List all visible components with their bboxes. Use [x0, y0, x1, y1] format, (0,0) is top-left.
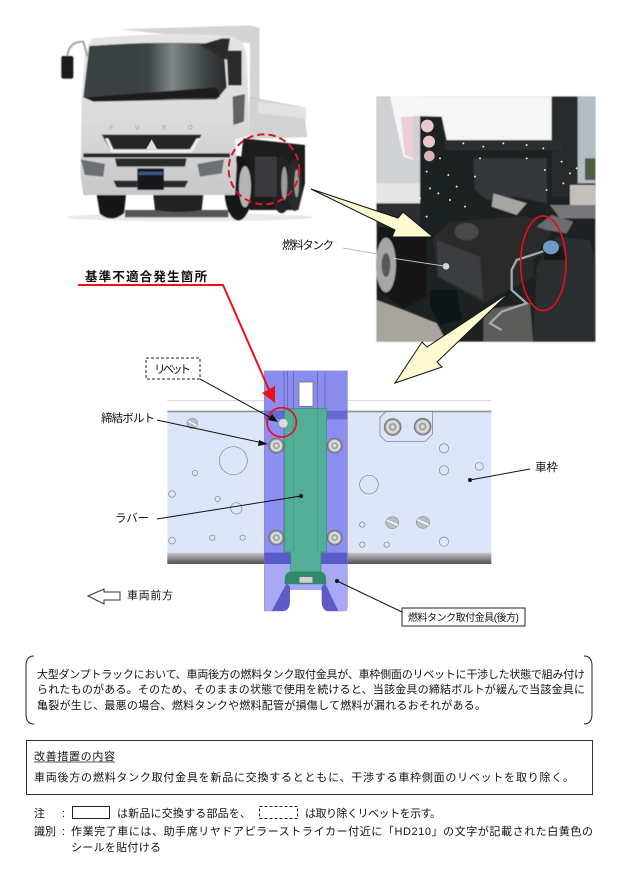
note: は新品に交換する部品を、 [117, 807, 251, 820]
note: は取り除くリベットを示す。 [305, 806, 441, 820]
description text: 大型ダンプトラックにおいて、車両後方の燃料タンク取付金具が、車枠側面のリベットに干渉した状態で組み付け [37, 667, 585, 681]
photo: fuel tank close-up [376, 97, 595, 342]
label: vehicle front arrow: 車両前方 [127, 588, 173, 602]
note [34, 806, 441, 820]
tank [433, 216, 553, 303]
note: 注 [34, 807, 45, 820]
plate with bolts [380, 412, 433, 441]
identification note [34, 824, 593, 854]
legend: solid box [72, 806, 110, 818]
identification note: シールを貼付ける [71, 840, 161, 854]
arrow: truck to close-up [311, 189, 433, 237]
wheel [378, 227, 427, 308]
label: fuel tank [282, 238, 377, 254]
cab [81, 34, 250, 195]
frame holes [169, 444, 483, 547]
bolts [269, 438, 284, 453]
label: vehicle front arrow [88, 588, 173, 604]
pink plate holes [421, 120, 434, 132]
description text: 亀裂が生じ、最悪の場合、燃料タンクや燃料配管が損傷して燃料が漏れるおそれがある。 [37, 698, 486, 712]
label: fastening bolt [101, 411, 268, 446]
pointer dot [393, 258, 449, 270]
mirror [67, 42, 87, 57]
label: rivet: リベット [154, 364, 191, 376]
bracket: blue body [264, 371, 347, 611]
panel: description [26, 656, 592, 724]
heading: non-conformity location: 基準不適合発生箇所 [85, 269, 207, 284]
label: fuel tank bracket (rear) [335, 579, 525, 626]
frame rail [167, 412, 491, 553]
rubber pad [284, 408, 327, 584]
engine bay [473, 158, 547, 203]
remedy text: 車両後方の燃料タンク取付金具を新品に交換するとともに、干渉する車枠側面のリベットを取り除く。 [34, 770, 574, 784]
red arrow: location [78, 285, 275, 403]
rivets [187, 418, 430, 529]
label: rubber [115, 494, 303, 525]
label: fuel tank: 燃料タンク [282, 238, 334, 252]
panel: remedy [26, 740, 592, 794]
callout: red dashed ellipse [229, 134, 299, 204]
grille [102, 135, 202, 149]
description text: られたものがある。そのため、そのままの状態で使用を続けると、当該金具の締結ボルトが緩んで当該金具に [37, 682, 585, 696]
arrow: close-up to diagram [395, 292, 510, 383]
note: : [62, 808, 65, 820]
legend: dashed box [260, 806, 298, 818]
blue cap and pipe [490, 240, 559, 330]
interfering rivet [279, 419, 288, 428]
label: rubber: ラバー [115, 512, 149, 525]
label: rivet [146, 358, 278, 422]
red circle [267, 408, 296, 437]
bolts [417, 142, 578, 218]
callout: red ellipse [521, 216, 566, 311]
reservoir [533, 237, 595, 342]
label: frame: 車枠 [535, 460, 558, 474]
label: fuel tank bracket (rear): 燃料タンク取付金具(後方) [408, 611, 519, 624]
photo: dump truck [61, 25, 313, 221]
dump body [120, 25, 259, 100]
identification note: 識別 [34, 825, 56, 838]
remedy heading: 改善措置の内容 [34, 749, 115, 763]
identification note: 作業完了車には、助手席リヤドアピラーストライカー付近に「HD210」の文字が記載された白黄色の [71, 824, 593, 838]
description text [37, 667, 585, 712]
slot [299, 382, 313, 406]
identification note: : [62, 826, 65, 838]
diagram: frame and bracket [167, 371, 491, 612]
chassis and wheels [237, 138, 305, 210]
label: frame [468, 460, 558, 482]
photo: dump truck: F U S O [109, 125, 193, 131]
label: fastening bolt: 締結ボルト [101, 411, 155, 425]
